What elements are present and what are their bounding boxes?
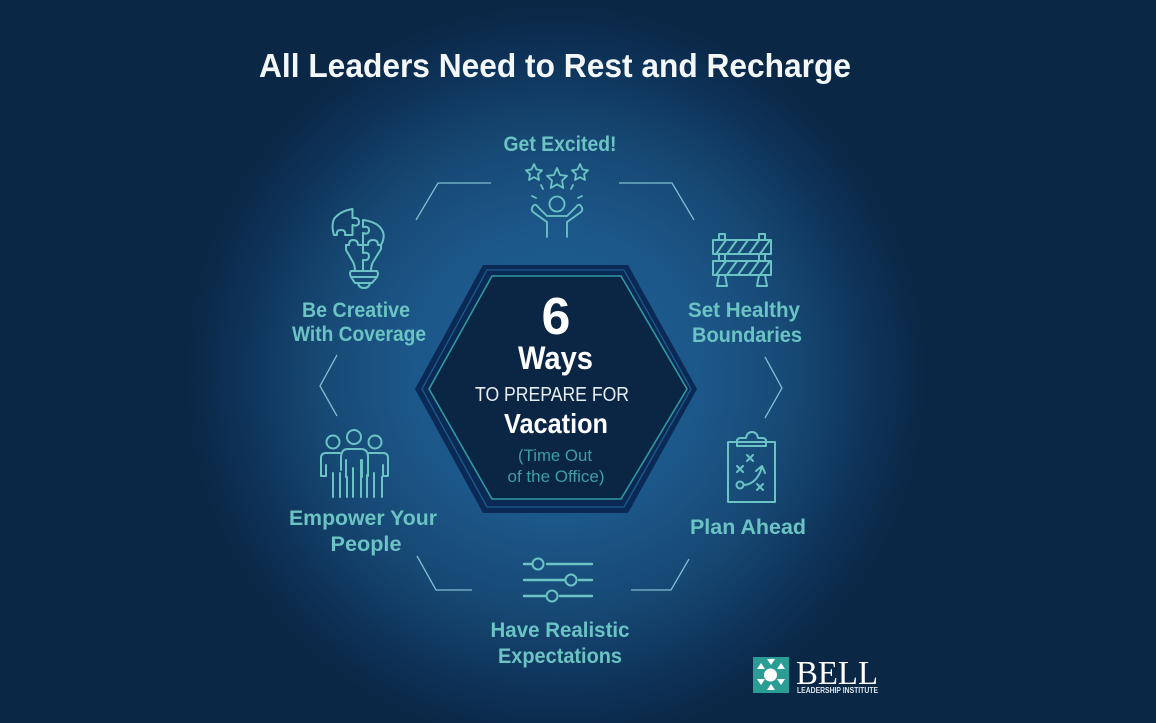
item: set healthy boundaries: [688, 234, 802, 347]
label: have realistic expectations: Have Realistic: [490, 619, 630, 642]
title: All Leaders Need to Rest and Recharge: [259, 47, 851, 84]
item: have realistic expectations: Expectations: [498, 645, 622, 668]
central hexagon: [415, 265, 697, 513]
label: get excited: Get Excited!: [504, 133, 616, 156]
item: be creative with coverage: With Coverage: [292, 323, 426, 346]
item: empower your people: People: [330, 533, 402, 556]
icon: sliders: [524, 558, 592, 602]
item: plan ahead: [690, 432, 806, 539]
item: have realistic expectations: [490, 558, 630, 668]
icon: barricade: [713, 234, 771, 286]
logo tagline: LEADERSHIP INSTITUTE: [797, 686, 879, 695]
icon: person with stars: [526, 164, 588, 237]
connector lines: [320, 183, 782, 590]
hexagon heading: vacation: Vacation: [504, 408, 608, 439]
logo: bell leadership institute: [753, 655, 879, 695]
item: set healthy boundaries: Boundaries: [692, 324, 802, 347]
central hexagon: of the Office): [508, 468, 604, 486]
icon: puzzle light bulb: [332, 209, 384, 288]
hexagon subheading: TO PREPARE FOR: [475, 384, 629, 406]
hexagon number: 6: [542, 288, 570, 346]
item: be creative with coverage: [292, 209, 426, 346]
icon: group of people: [321, 430, 388, 497]
hexagon heading: ways: Ways: [518, 340, 593, 376]
label: plan ahead: Plan Ahead: [690, 516, 806, 539]
label: set healthy boundaries: Set Healthy: [688, 299, 800, 322]
logo mark: [753, 657, 789, 693]
item: get excited: [504, 133, 616, 237]
logo wordmark: BELL: [796, 655, 878, 692]
item: empower your people: [289, 430, 437, 556]
icon: clipboard play: [728, 432, 775, 502]
label: be creative with coverage: Be Creative: [302, 299, 410, 322]
hexagon note: (Time Out: [518, 447, 592, 465]
label: empower your people: Empower Your: [289, 507, 437, 530]
